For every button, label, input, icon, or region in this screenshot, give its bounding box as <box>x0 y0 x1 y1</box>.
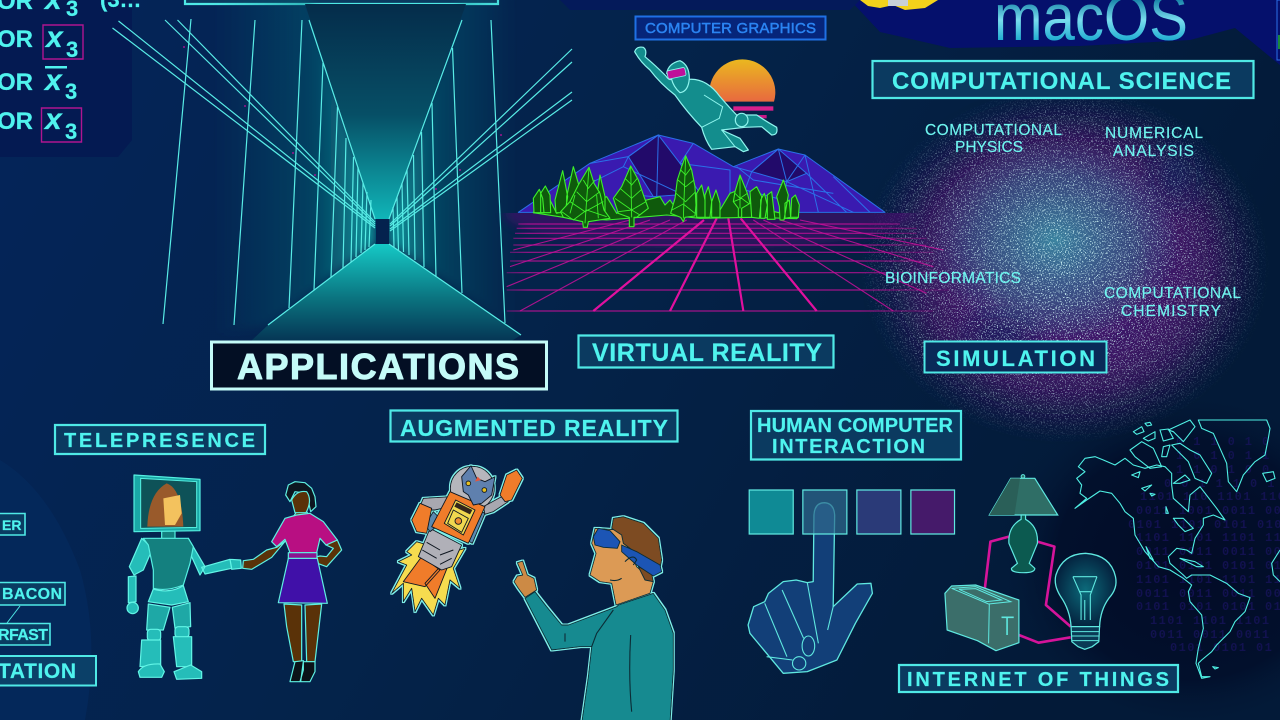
panel: simulation cloud <box>860 90 1280 450</box>
text: numerical analysis: ANALYSIS <box>1113 143 1194 160</box>
label: computational science: COMPUTATIONAL SCIENCE <box>892 68 1231 95</box>
greenland <box>1198 420 1270 492</box>
text: computational physics: PHYSICS <box>955 139 1023 156</box>
helmet <box>450 466 494 510</box>
sweater <box>525 592 673 720</box>
helmet head <box>667 61 689 93</box>
label: human computer interaction: INTERACTION <box>772 436 925 458</box>
icon: yellow shape cut off at top <box>860 0 938 10</box>
magenta dots <box>183 46 502 190</box>
illustration: world map <box>1075 420 1280 678</box>
text: bioinformatics: BIOINFORMATICS <box>885 270 1021 287</box>
row: boxed x3 lower <box>0 103 82 144</box>
row: boxed x3 <box>0 21 83 62</box>
chart texture: binary digits: 0011 0011 0011 <box>1150 628 1270 642</box>
row: x3 with bar: x <box>43 64 63 97</box>
text: numerical analysis <box>1105 125 1203 160</box>
label: human computer interaction: HUMAN COMPUTER <box>757 415 954 437</box>
woman legs <box>284 604 322 662</box>
row: x3 with bar: 3 <box>65 79 77 104</box>
toaster <box>945 585 1019 651</box>
label: internet of things: INTERNET OF THINGS <box>907 669 1169 691</box>
labels cut off at left edge <box>0 514 96 686</box>
hair <box>612 517 662 582</box>
label: simulation: SIMULATION <box>936 346 1095 371</box>
robot arm left <box>128 538 153 603</box>
headset <box>622 545 662 576</box>
robot <box>127 475 241 679</box>
text: computational chemistry <box>1104 285 1241 320</box>
cat head <box>462 466 495 505</box>
backpack <box>425 512 485 543</box>
chart texture: binary digits <box>1128 435 1280 655</box>
monitor head <box>134 475 200 532</box>
pointing hand <box>748 503 872 673</box>
left wall glow <box>215 0 375 335</box>
button 2 <box>803 490 847 534</box>
woman boots <box>290 661 315 682</box>
floor grid <box>507 218 950 311</box>
mesh pine C <box>671 156 696 222</box>
label: computer graphics: COMPUTER GRAPHICS <box>645 20 816 37</box>
label: telepresence: TELEPRESENCE <box>64 430 255 452</box>
torso <box>432 492 485 543</box>
sun <box>709 59 775 118</box>
corridor floor <box>250 244 521 342</box>
pines centre <box>697 185 720 217</box>
corridor door <box>376 219 389 244</box>
label: computer graphics <box>636 16 826 40</box>
mountains <box>518 135 885 212</box>
text: computational chemistry: COMPUTATIONAL <box>1104 285 1241 302</box>
woman left arm <box>243 541 286 569</box>
text: numerical analysis: NUMERICAL <box>1105 125 1203 142</box>
robot neck <box>162 531 175 539</box>
robot legs <box>147 603 191 630</box>
crown <box>475 477 481 482</box>
box cut off at top <box>185 0 498 4</box>
lower fist <box>735 113 748 127</box>
illustration: internet of things <box>945 475 1116 651</box>
robot pelvis <box>148 586 188 605</box>
button 1 <box>749 490 793 534</box>
raised arm <box>483 497 508 514</box>
label: bacon <box>0 582 65 605</box>
africa edge <box>1272 550 1280 582</box>
small pines left <box>533 167 605 213</box>
cat eyes <box>466 481 487 492</box>
row: boxed x3: 3 <box>66 37 78 62</box>
woman top <box>272 513 337 553</box>
label: automation fragment: TATION <box>0 660 76 683</box>
connector line <box>7 606 20 623</box>
row: x3 with bar <box>0 64 77 104</box>
illustration: flying VR figure <box>635 47 777 152</box>
text: computational chemistry: CHEMISTRY <box>1121 303 1221 320</box>
label: virtual reality: VIRTUAL REALITY <box>592 339 822 367</box>
pines right <box>750 180 799 220</box>
hand <box>514 561 537 597</box>
top blue backdrop <box>850 0 1280 65</box>
top centre shadow <box>560 0 860 10</box>
row: boxed x3: x <box>44 21 64 54</box>
body folds <box>702 95 735 147</box>
text: computational physics <box>925 122 1062 156</box>
corridor lines <box>112 19 572 335</box>
grid horizon glow <box>500 213 920 252</box>
label: bacon: BACON <box>2 586 62 603</box>
round tree D <box>733 175 750 217</box>
right wall glow <box>389 0 515 335</box>
lamp <box>989 475 1058 573</box>
body <box>635 47 777 152</box>
label: computer fragment <box>0 514 25 535</box>
illustration: telepresence robot and woman <box>127 475 342 682</box>
magenta connections <box>985 537 1071 643</box>
illustration: virtual landscape <box>507 59 950 311</box>
chest panel <box>444 500 475 535</box>
grey legs <box>418 528 462 570</box>
button 3 <box>857 490 901 534</box>
label: computer fragment: ER <box>2 517 21 533</box>
row: boxed x3 lower: x <box>43 103 63 136</box>
chart texture: binary digits: 0101 0101 01 <box>1170 641 1273 655</box>
label: telepresence <box>55 425 265 454</box>
visor <box>667 67 686 79</box>
woman face <box>292 491 310 513</box>
label: augmented reality: AUGMENTED REALITY <box>400 415 668 441</box>
woman right arm <box>307 540 342 567</box>
ear and folds <box>565 557 637 712</box>
woman <box>243 482 342 682</box>
top right edge panel <box>1277 0 1280 60</box>
label: human computer interaction <box>751 411 961 460</box>
woman waist band <box>288 553 317 558</box>
neck and face <box>590 528 653 605</box>
robot arm right <box>188 538 241 575</box>
illustration: forest <box>533 156 799 227</box>
label: computational science <box>872 61 1254 98</box>
woman hair <box>286 482 316 512</box>
panel: boolean expressions cut off at left <box>0 0 142 144</box>
illustration: cat astronaut <box>392 466 522 615</box>
row: top line <box>0 0 142 21</box>
illustration: server corridor <box>112 0 572 342</box>
woman on screen <box>147 483 183 527</box>
light bulb <box>1055 553 1116 649</box>
woman skirt <box>278 558 327 603</box>
orange legs <box>403 557 449 598</box>
text: computational physics: COMPUTATIONAL <box>925 122 1062 139</box>
label: automation fragment <box>0 656 96 686</box>
illustration: man with AR headset <box>514 517 673 720</box>
row: boxed x3 lower: 3 <box>65 119 77 144</box>
left arm <box>418 497 450 510</box>
heading: applications: APPLICATIONS <box>237 346 519 387</box>
chart texture: binary digits: 1101 1101 1101 <box>1150 614 1270 628</box>
north and south america <box>1075 457 1250 678</box>
mesh pine A <box>561 167 610 227</box>
robot torso <box>143 538 193 589</box>
mesh pine B <box>613 166 648 227</box>
hedge <box>533 190 798 220</box>
rocket flames <box>392 542 465 615</box>
corridor ceiling <box>305 4 466 219</box>
woman neck <box>293 512 310 517</box>
button 4 <box>911 490 955 534</box>
arctic islands, lakes and caribbean <box>1130 420 1275 669</box>
illustration: human computer interaction buttons and hand <box>748 490 955 673</box>
